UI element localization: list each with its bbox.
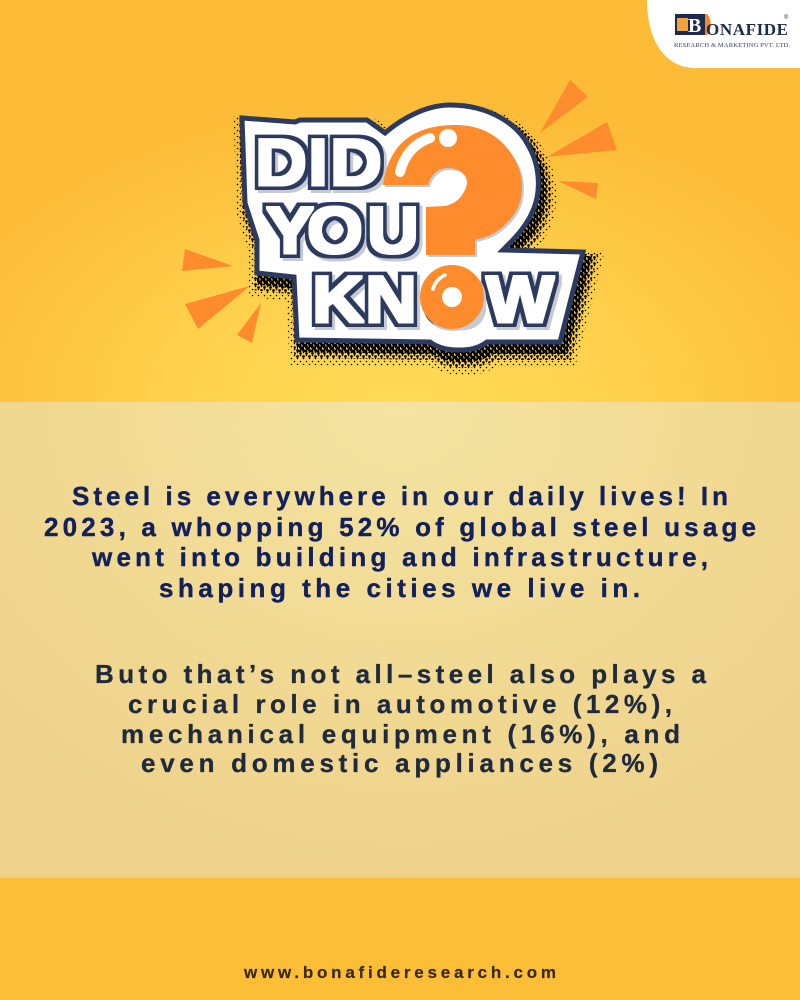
website url: www.bonafideresearch.com	[243, 963, 556, 982]
background: lower yellow band	[0, 878, 800, 1000]
logo mark: B	[688, 15, 701, 37]
icon: orange ring letter o	[431, 275, 473, 318]
icon: orange question mark	[383, 125, 522, 255]
heading: did you know: KNOW	[312, 263, 555, 336]
white badge outline	[242, 105, 583, 350]
text block: steel usage paragraph: Steel is everywhere in our daily lives! In	[72, 481, 728, 511]
text block: steel usage paragraph: went into building and infrastructure,	[91, 542, 708, 572]
burst rays lower left	[182, 249, 261, 343]
heading: did you know: YOU	[266, 194, 419, 267]
logo tagline: RESEARCH & MARKETING PVT. LTD.	[674, 42, 790, 49]
text block: other uses paragraph: even domestic appliances (2%)	[141, 748, 658, 778]
text block: steel usage paragraph: 2023, a whopping 52% of global steel usage	[44, 512, 756, 542]
background: upper yellow band	[0, 0, 800, 402]
panel: pale text background	[0, 402, 800, 878]
registered mark: ®	[784, 14, 789, 21]
logo mark	[675, 14, 711, 37]
heading: did you know: DID	[255, 126, 382, 199]
text block: other uses paragraph: mechanical equipment (16%), and	[121, 719, 680, 749]
text block: other uses paragraph: Buto that’s not all–steel also plays a	[95, 659, 707, 689]
logo wordmark: ONAFIDE	[706, 20, 788, 39]
text block: steel usage paragraph: shaping the cities we live in.	[159, 573, 640, 603]
text block: steel usage paragraph	[44, 481, 756, 603]
heading: did you know	[255, 126, 555, 336]
text block: other uses paragraph	[95, 659, 707, 778]
burst rays upper right	[540, 80, 617, 199]
text block: other uses paragraph: crucial role in automotive (12%),	[128, 689, 672, 719]
logo: bonafide corner tab	[647, 0, 800, 68]
halftone shadow	[246, 113, 588, 362]
